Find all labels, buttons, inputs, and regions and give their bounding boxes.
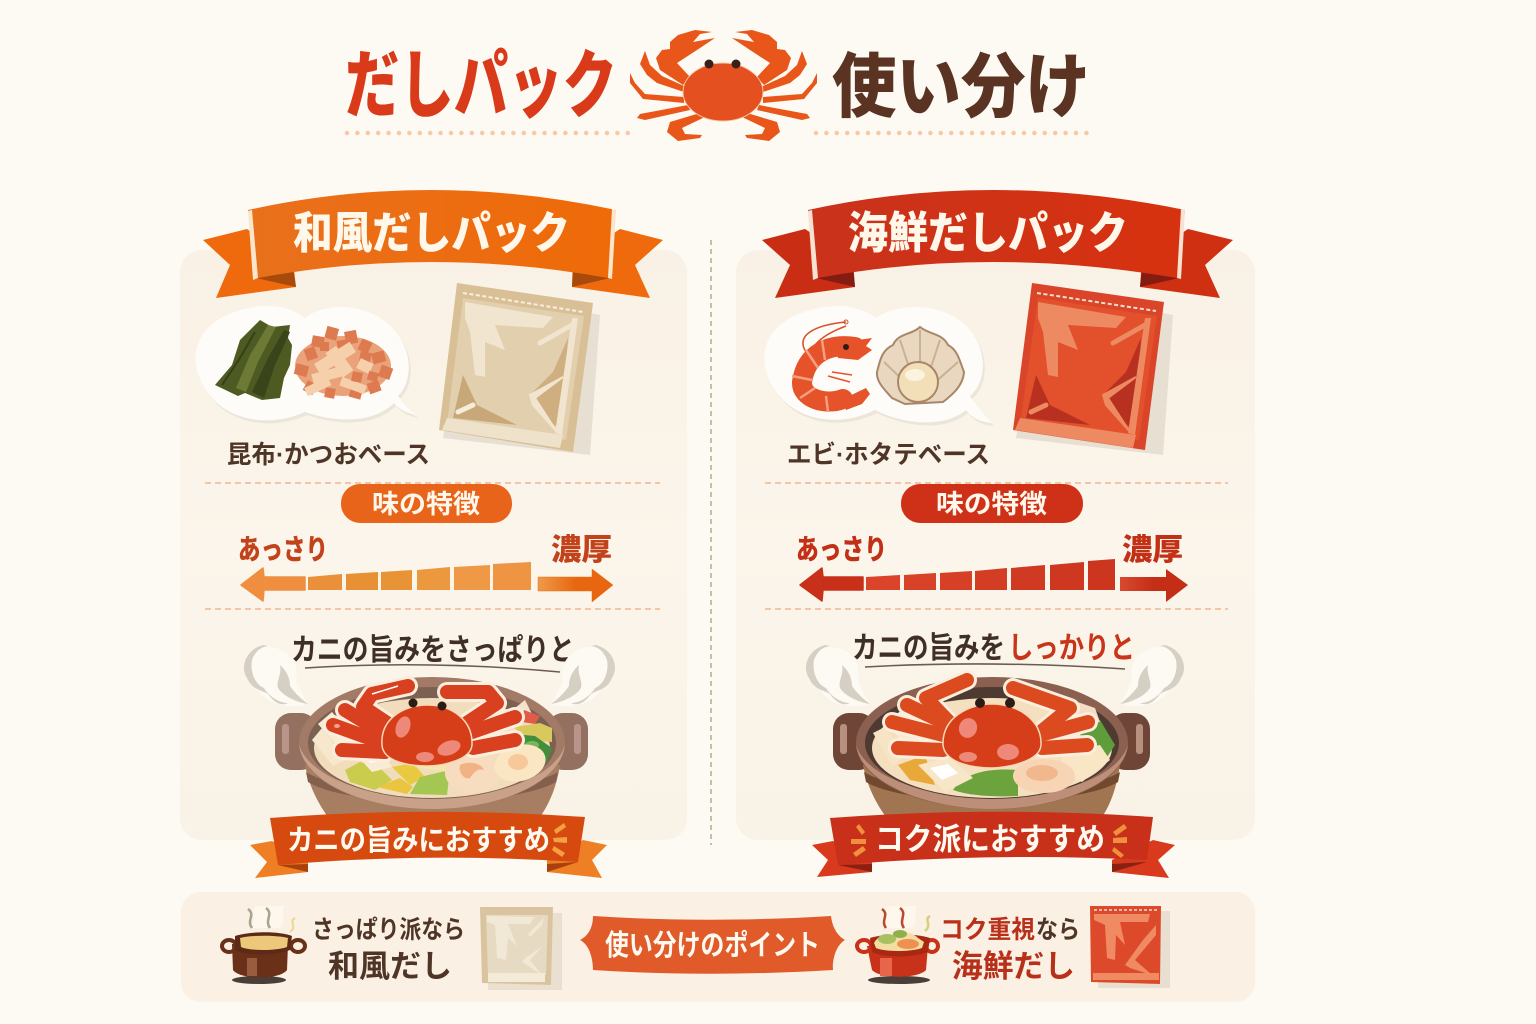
pot bowl xyxy=(305,765,560,820)
panel: seafood dashi pack xyxy=(736,190,1255,878)
text: rich preference: コク重視 xyxy=(940,916,1035,944)
recommendation ribbon: wafu: カニの旨みにおすすめ xyxy=(287,824,550,857)
food: vegetables xyxy=(312,700,552,795)
base label: エビ·ホタテベース xyxy=(787,441,990,469)
flavor heading: カニの旨みを xyxy=(852,632,1005,665)
icon: scallop xyxy=(877,327,964,404)
recommendation ribbon: seafood xyxy=(812,812,1175,878)
panel background xyxy=(736,250,1255,840)
icon: crab xyxy=(630,30,817,141)
scale segments xyxy=(866,559,1115,590)
icon: katsuobushi xyxy=(294,326,393,400)
food: vegetables xyxy=(873,700,1115,796)
text: rich preference: なら xyxy=(1036,916,1080,944)
flavor heading: カニの旨みをさっぱりと xyxy=(291,634,575,667)
arrow right xyxy=(1120,569,1188,602)
sign: usage point: 使い分けのポイント xyxy=(605,929,820,962)
ingredients bubble: shrimp and scallop xyxy=(764,306,994,426)
taste pill: 味の特徴 xyxy=(936,489,1047,519)
sign: usage point xyxy=(580,916,845,974)
title dotted underline xyxy=(347,131,1094,135)
base label: 昆布·かつおベース xyxy=(227,441,430,469)
arrow left xyxy=(800,568,863,601)
panel: usage points footer xyxy=(181,892,1255,1002)
dashi pack: wafu xyxy=(439,283,600,455)
pot handles xyxy=(275,713,317,770)
icon: small red pot xyxy=(857,906,938,984)
heading text: 海鮮だしパック xyxy=(848,209,1128,258)
title xyxy=(345,30,1094,141)
icon: small brown pot xyxy=(222,906,305,984)
recommendation ribbon: wafu xyxy=(250,812,607,878)
crab hot pot: seafood xyxy=(833,677,1150,820)
icon: kombu xyxy=(215,320,292,400)
arrow right xyxy=(538,569,613,602)
mini pack: wafu xyxy=(480,907,562,990)
taste pill xyxy=(901,484,1083,523)
mini pack: seafood xyxy=(1090,906,1170,988)
center divider xyxy=(710,240,712,845)
flavor heading xyxy=(852,632,1135,669)
crab in pot xyxy=(333,686,515,766)
dashi pack: seafood xyxy=(1013,283,1173,455)
divider dashes xyxy=(205,483,660,609)
flavor heading: しっかりと xyxy=(1008,632,1135,665)
divider dashes xyxy=(765,483,1228,609)
panel: wafu dashi pack xyxy=(180,190,687,878)
text: wafu dashi: 和風だし xyxy=(328,949,452,984)
pot rim xyxy=(856,677,1128,809)
taste pill: 味の特徴 xyxy=(372,489,480,519)
text: light preference: さっぱり派なら xyxy=(312,916,465,944)
crab hot pot: wafu xyxy=(275,677,588,820)
heading ribbon: seafood xyxy=(762,190,1233,298)
icon: shrimp xyxy=(792,320,872,412)
icon: steam right pot xyxy=(806,645,1184,706)
light label: あっさり xyxy=(238,534,328,565)
sparks xyxy=(851,824,1127,858)
rich label: 濃厚 xyxy=(551,534,612,567)
heading text: 和風だしパック xyxy=(293,209,570,258)
text: seafood dashi: 海鮮だし xyxy=(952,949,1075,984)
title right text: 使い分け xyxy=(832,48,1090,126)
panel background xyxy=(180,250,687,840)
crab in pot xyxy=(892,680,1088,768)
arrow left xyxy=(241,568,305,601)
icon: steam left pot xyxy=(244,645,615,706)
heading ribbon: wafu xyxy=(203,190,663,298)
taste scale: wafu xyxy=(238,534,613,602)
taste scale: seafood xyxy=(796,534,1188,602)
ingredients bubble: kombu and katsuo xyxy=(196,306,419,423)
light label: あっさり xyxy=(796,534,887,565)
pot rim xyxy=(299,677,565,809)
pot bowl xyxy=(863,765,1120,820)
recommendation ribbon: seafood: コク派におすすめ xyxy=(875,822,1105,857)
rich label: 濃厚 xyxy=(1122,534,1183,567)
title left text: だしパック xyxy=(345,44,617,127)
sparks xyxy=(552,823,567,857)
scale segments xyxy=(308,562,531,590)
pot handles xyxy=(833,713,875,770)
taste pill xyxy=(341,484,512,523)
